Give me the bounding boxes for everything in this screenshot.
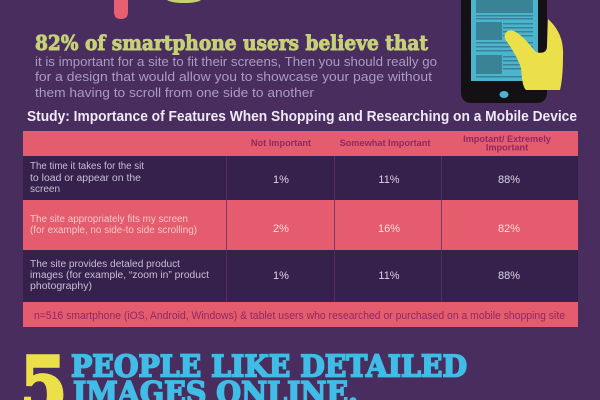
table header row [23, 131, 578, 156]
table row 3: photography) [30, 281, 92, 292]
table row 1: The time it takes for the sit [30, 161, 144, 172]
table footnote [23, 302, 578, 327]
body text: for a design that would allow you to showcase your page without [35, 69, 432, 84]
table row 1: 88% [498, 174, 520, 186]
table header row: Important [486, 142, 528, 152]
body text [35, 54, 437, 100]
icon: pink bar top [114, 0, 128, 19]
heading: 82% of smartphone users: 82% of smartphone users believe that [35, 31, 428, 55]
table row 3: images (for example, “zoom in” product [30, 270, 209, 281]
table row 1: 1% [273, 174, 289, 186]
table row 2: 2% [273, 223, 289, 235]
table header row: Somewhat Important [340, 138, 430, 148]
table header row: Impotant/ Extremely [463, 134, 552, 144]
table row 2: 82% [498, 223, 520, 235]
table row 2 [23, 200, 578, 250]
table header row: Not Important [251, 138, 311, 148]
table title: Study: Importance of Features When Shopping and Researching on a Mobile Device [27, 109, 577, 125]
table row 2: 16% [378, 223, 400, 235]
icon: green shape top [167, 0, 201, 3]
body text: it is important for a site to fit their screens, Then you should really go [35, 54, 437, 69]
section heading: PEOPLE LIKE DETAILED [71, 348, 467, 384]
table row 1: screen [30, 184, 60, 195]
icon: phone in hand [461, 0, 563, 103]
table row 1: 11% [378, 174, 400, 186]
table row 3: 88% [498, 270, 520, 282]
body text: them having to scroll from one side to another [35, 85, 315, 100]
table row 2: The site appropriately fits my screen [30, 214, 188, 225]
table [23, 131, 578, 327]
table row 3: 1% [273, 270, 289, 282]
table row 1: to load or appear on the [30, 173, 141, 184]
table row 3 [23, 250, 578, 302]
table row 3: 11% [378, 270, 400, 282]
section heading [71, 348, 467, 400]
table footnote: n=516 smartphone (iOS, Android, Windows) & tablet users who researched or purchased on a mobile shopping site [34, 310, 565, 322]
table row 1 [23, 156, 578, 200]
table row 2: (for example, no side-to side scrolling) [30, 225, 197, 236]
table row 3: The site provides detaled product [30, 259, 180, 270]
